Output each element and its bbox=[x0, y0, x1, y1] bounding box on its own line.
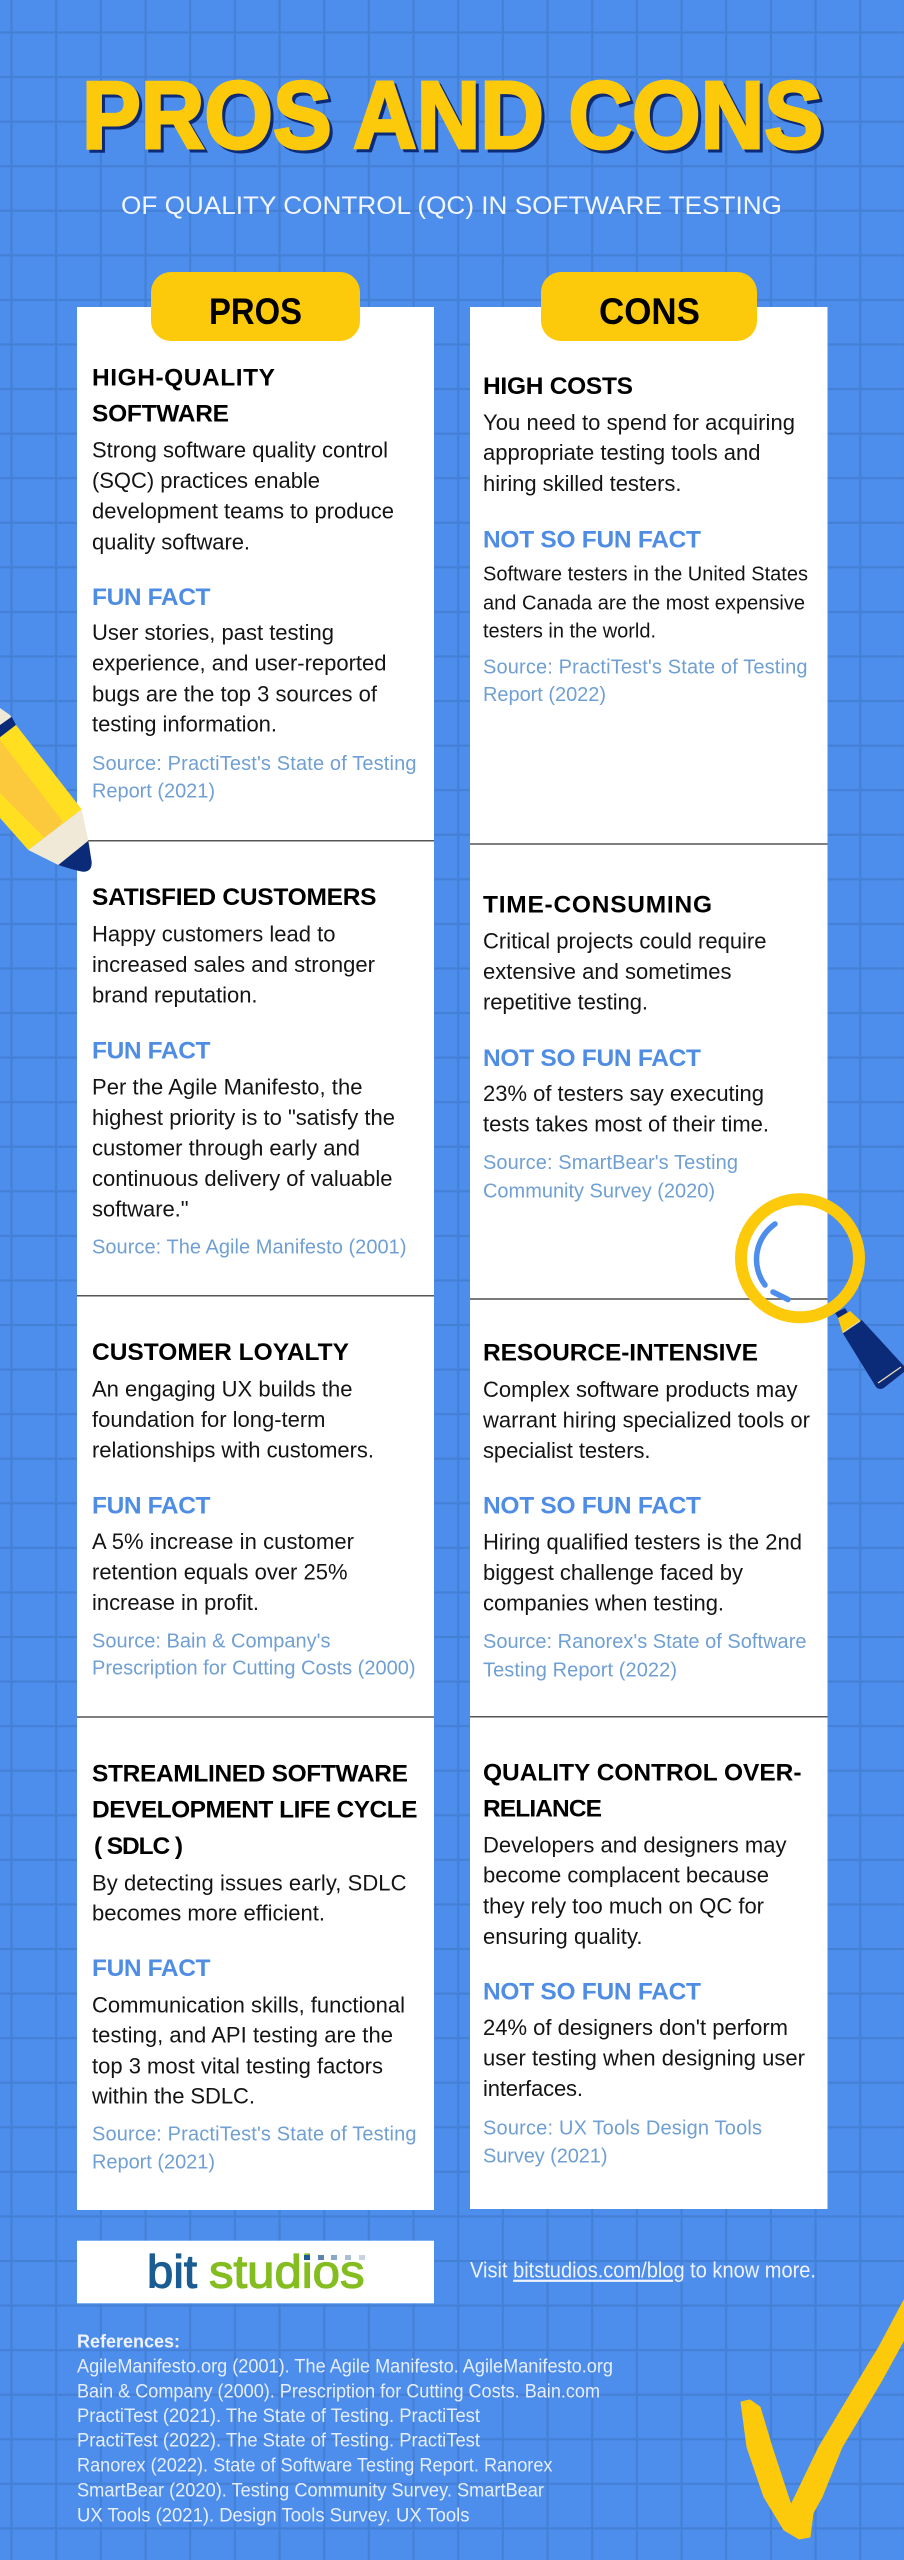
pro: satisfied customers bbox=[92, 884, 406, 1258]
handle bbox=[835, 1308, 904, 1389]
con: quality control over-reliance: Developers and designers may bbox=[483, 1832, 786, 1857]
con: resource-intensive: warrant hiring specialized tools or bbox=[482, 1408, 810, 1433]
pro: high-quality software: Report (2021) bbox=[92, 781, 215, 803]
pro: satisfied customers: brand reputation. bbox=[92, 982, 258, 1007]
pro: high-quality software: HIGH-QUALITY bbox=[92, 364, 275, 391]
pro: customer loyalty: retention equals over 25% bbox=[92, 1559, 348, 1584]
pro: high-quality software bbox=[92, 364, 416, 803]
con: time-consuming bbox=[483, 892, 769, 1202]
con: resource-intensive: NOT SO FUN FACT bbox=[483, 1492, 701, 1519]
pro: high-quality software: development teams to produce bbox=[92, 499, 394, 524]
call to action text: Visit bitstudios.com/blog to know more. bbox=[470, 2258, 816, 2283]
references: PractiTest (2022). The State of Testing. PractiTest bbox=[77, 2431, 481, 2452]
references: References: bbox=[77, 2330, 180, 2351]
con: quality control over-reliance: they rely too much on QC for bbox=[483, 1893, 764, 1918]
con: time-consuming: Critical projects could require bbox=[483, 929, 766, 954]
pro: streamlined SDLC: FUN FACT bbox=[92, 1955, 211, 1982]
references: Ranorex (2022). State of Software Testing Report. Ranorex bbox=[77, 2456, 553, 2477]
con: time-consuming: TIME-CONSUMING bbox=[483, 892, 712, 919]
con: quality control over-reliance: Survey (2021) bbox=[483, 2145, 608, 2167]
pro: streamlined SDLC: Source: PractiTest's State of Testing bbox=[92, 2124, 416, 2146]
references: Bain & Company (2000). Prescription for Cutting Costs. Bain.com bbox=[77, 2381, 600, 2402]
pro: customer loyalty: Source: Bain & Company's bbox=[92, 1630, 330, 1652]
pro: streamlined SDLC: within the SDLC. bbox=[91, 2084, 255, 2109]
pro: high-quality software: (SQC) practices enable bbox=[92, 468, 320, 493]
con: quality control over-reliance: NOT SO FUN FACT bbox=[483, 1978, 701, 2005]
pro: streamlined SDLC: testing, and API testing are the bbox=[92, 2023, 393, 2048]
logo: bit studios bbox=[77, 2241, 434, 2303]
con: resource-intensive: biggest challenge faced by bbox=[483, 1560, 743, 1585]
pro: customer loyalty: A 5% increase in customer bbox=[92, 1529, 354, 1554]
pro: customer loyalty: CUSTOMER LOYALTY bbox=[92, 1339, 349, 1366]
pro: high-quality software: experience, and user-reported bbox=[92, 651, 386, 676]
pro: high-quality software: Source: PractiTest's State of Testing bbox=[92, 753, 416, 775]
pro: customer loyalty: foundation for long-term bbox=[92, 1407, 326, 1432]
con: quality control over-reliance: ensuring quality. bbox=[483, 1924, 642, 1949]
pro: satisfied customers: highest priority is to "satisfy the bbox=[92, 1105, 395, 1130]
pro: customer loyalty: An engaging UX builds the bbox=[92, 1377, 352, 1402]
pro: high-quality software: SOFTWARE bbox=[92, 400, 229, 427]
con: high costs: Source: PractiTest's State of Testing bbox=[483, 656, 808, 678]
subtitle: OF QUALITY CONTROL (QC) IN SOFTWARE TESTING bbox=[121, 192, 782, 220]
pro: satisfied customers: Happy customers lead to bbox=[92, 921, 336, 946]
references: AgileManifesto.org (2001). The Agile Manifesto. AgileManifesto.org bbox=[77, 2357, 613, 2378]
con: resource-intensive: companies when testing. bbox=[483, 1591, 724, 1616]
con: resource-intensive: Complex software products may bbox=[483, 1377, 798, 1402]
con: time-consuming: 23% of testers say executing bbox=[483, 1081, 764, 1106]
con: high costs bbox=[483, 373, 808, 706]
pro: customer loyalty: FUN FACT bbox=[92, 1492, 211, 1519]
references: SmartBear (2020). Testing Community Survey. SmartBear bbox=[77, 2481, 545, 2502]
pro: satisfied customers: software." bbox=[92, 1196, 188, 1221]
pro: streamlined SDLC: STREAMLINED SOFTWARE bbox=[92, 1761, 408, 1788]
con: quality control over-reliance: user testing when designing user bbox=[483, 2046, 805, 2071]
pro: streamlined SDLC: DEVELOPMENT LIFE CYCLE bbox=[92, 1797, 418, 1824]
con: high costs: appropriate testing tools and bbox=[483, 440, 760, 465]
pro: satisfied customers: continuous delivery of valuable bbox=[92, 1166, 392, 1191]
con: time-consuming: extensive and sometimes bbox=[483, 959, 732, 984]
pro: satisfied customers: customer through early and bbox=[92, 1135, 360, 1160]
pros tab bbox=[151, 272, 360, 341]
con: high costs: testers in the world. bbox=[483, 620, 656, 642]
references: PractiTest (2021). The State of Testing. PractiTest bbox=[77, 2406, 481, 2427]
con: high costs: hiring skilled testers. bbox=[483, 471, 682, 496]
pro: satisfied customers: FUN FACT bbox=[92, 1037, 211, 1064]
con: quality control over-reliance: RELIANCE bbox=[483, 1796, 602, 1823]
pro: high-quality software: quality software. bbox=[92, 529, 250, 554]
con: resource-intensive bbox=[482, 1340, 810, 1682]
panel: pros column bbox=[77, 272, 434, 2210]
pros tab: PROS bbox=[209, 291, 302, 332]
icon: pencil bbox=[0, 708, 92, 872]
con: resource-intensive: Hiring qualified testers is the 2nd bbox=[483, 1529, 802, 1554]
con: time-consuming: tests takes most of their time. bbox=[483, 1112, 769, 1137]
con: resource-intensive: Source: Ranorex's State of Software bbox=[483, 1631, 806, 1653]
cons card background bbox=[470, 307, 828, 2209]
con: high costs: You need to spend for acquiring bbox=[483, 410, 795, 435]
pro: streamlined SDLC: Report (2021) bbox=[92, 2151, 215, 2173]
pro: streamlined SDLC: Communication skills, functional bbox=[92, 1992, 405, 2017]
title: PROS AND CONS bbox=[85, 65, 826, 172]
pro: customer loyalty: relationships with customers. bbox=[92, 1437, 374, 1462]
pros card background bbox=[77, 307, 434, 2210]
con: high costs: HIGH COSTS bbox=[483, 373, 633, 400]
pro: high-quality software: testing information. bbox=[92, 712, 277, 737]
con: quality control over-reliance: 24% of designers don't perform bbox=[483, 2015, 788, 2040]
pro: high-quality software: FUN FACT bbox=[92, 584, 211, 611]
con: quality control over-reliance: QUALITY CONTROL OVER- bbox=[483, 1760, 802, 1787]
con: quality control over-reliance bbox=[483, 1760, 805, 2167]
pro: high-quality software: User stories, past testing bbox=[92, 620, 334, 645]
cons tab: CONS bbox=[599, 291, 700, 332]
con: high costs: and Canada are the most expensive bbox=[483, 592, 805, 614]
pro: satisfied customers: Per the Agile Manifesto, the bbox=[92, 1074, 362, 1099]
pro: customer loyalty: increase in profit. bbox=[92, 1590, 259, 1615]
con: time-consuming: NOT SO FUN FACT bbox=[483, 1045, 701, 1072]
icon: yellow check mark bbox=[741, 2300, 904, 2539]
pro: streamlined SDLC: ( SDLC ) bbox=[94, 1833, 183, 1860]
con: high costs: Report (2022) bbox=[483, 684, 606, 706]
pro: satisfied customers: SATISFIED CUSTOMERS bbox=[92, 884, 376, 911]
references bbox=[77, 2330, 613, 2526]
icon: magnifying glass bbox=[741, 1199, 904, 1389]
panel: cons column bbox=[470, 272, 828, 2209]
pro: streamlined SDLC: becomes more efficient. bbox=[92, 1901, 325, 1926]
con: high costs: Software testers in the United States bbox=[483, 564, 808, 586]
pro: customer loyalty bbox=[92, 1339, 416, 1679]
con: resource-intensive: RESOURCE-INTENSIVE bbox=[483, 1340, 758, 1367]
references: UX Tools (2021). Design Tools Survey. UX Tools bbox=[77, 2505, 470, 2526]
con: high costs: NOT SO FUN FACT bbox=[483, 526, 701, 553]
pro: satisfied customers: increased sales and stronger bbox=[92, 952, 375, 977]
logo: bit studios: bit bbox=[147, 2246, 197, 2298]
con: time-consuming: Community Survey (2020) bbox=[483, 1180, 715, 1202]
pro: satisfied customers: Source: The Agile Manifesto (2001) bbox=[92, 1236, 406, 1258]
title: PROS AND CONS bbox=[82, 62, 823, 169]
con: resource-intensive: Testing Report (2022) bbox=[483, 1660, 677, 1682]
con: resource-intensive: specialist testers. bbox=[483, 1438, 650, 1463]
pro: streamlined SDLC bbox=[91, 1761, 418, 2173]
pro: high-quality software: bugs are the top 3 sources of bbox=[92, 682, 378, 707]
cons tab bbox=[541, 272, 757, 341]
logo: bit studios: studios bbox=[209, 2246, 364, 2298]
pro: streamlined SDLC: top 3 most vital testing factors bbox=[92, 2053, 383, 2078]
con: quality control over-reliance: interfaces. bbox=[483, 2076, 583, 2101]
pro: streamlined SDLC: By detecting issues early, SDLC bbox=[92, 1870, 407, 1895]
con: time-consuming: repetitive testing. bbox=[483, 990, 648, 1015]
con: quality control over-reliance: Source: UX Tools Design Tools bbox=[483, 2117, 762, 2139]
con: quality control over-reliance: become complacent because bbox=[483, 1863, 769, 1888]
pro: high-quality software: Strong software quality control bbox=[92, 437, 388, 462]
pro: customer loyalty: Prescription for Cutting Costs (2000) bbox=[92, 1657, 416, 1679]
con: time-consuming: Source: SmartBear's Testing bbox=[483, 1152, 738, 1174]
